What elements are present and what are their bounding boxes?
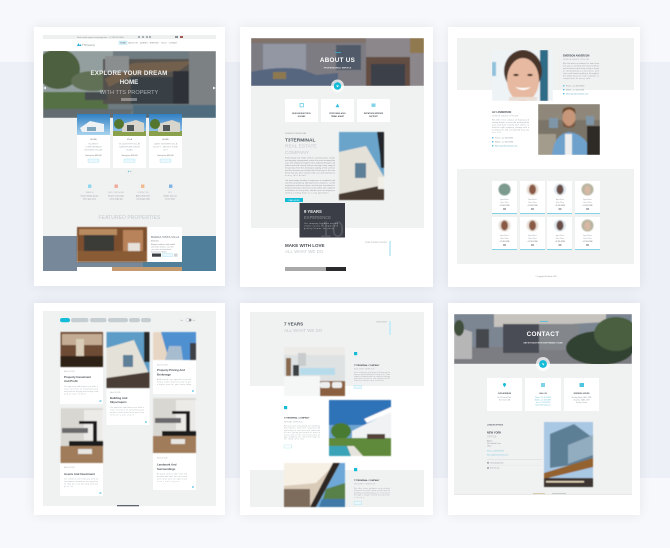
contact box: working hours: Monday-Friday: 9AM - 6PM <box>572 396 592 399</box>
side note with bar: SOME INTEREST WORDS <box>365 242 388 244</box>
contact hero: GET IN TOUCH WITH OUR FRIENDLY TEAM <box>523 342 563 344</box>
woman bio: or sell property at a fair price, with <box>563 70 599 72</box>
property card 2: LAKESHORE DRIVE <box>119 146 140 148</box>
contact building photo <box>544 422 593 487</box>
about text block: REAL ESTATE <box>285 144 317 150</box>
team grid: Sales Officer <box>556 237 565 240</box>
blog card 1: and private homes <box>64 392 86 396</box>
team grid: Sales Officer <box>528 201 537 204</box>
team grid: Agent Name <box>556 198 564 201</box>
team grid: +12 345 67890 <box>555 241 565 243</box>
about text block: confidence at every step, whether you are buying or <box>285 189 335 192</box>
property card 2: Starting from $520,000 <box>121 154 138 157</box>
team grid: +12 345 67890 <box>499 205 510 207</box>
service text 1 <box>354 352 391 388</box>
property card 2: VILLA <box>127 138 133 141</box>
office details: 10010 <box>487 446 491 448</box>
contact box: phone: CALL US <box>539 392 548 395</box>
view toggle: Grid <box>180 320 183 322</box>
man bio <box>492 111 529 148</box>
contact page body <box>454 364 632 494</box>
heading: make with love <box>285 243 324 254</box>
contact box: phone: Fax: +12 34 567892 <box>536 402 550 404</box>
property card 3: IN CITY - MIDDLE ZONE <box>153 146 178 148</box>
service text 3: through a single trusted local partner <box>354 494 390 497</box>
woman bio: She has been an advisor for more than <box>563 62 599 65</box>
feature icons: FIND YOUR HOME <box>108 192 125 194</box>
contact box: working hours: Saturday: 10AM - 4PM <box>573 398 590 402</box>
about text block: selling a family home or a city apartment. <box>285 192 329 194</box>
about text block: Our team brings decades of experience in residential and <box>285 179 335 182</box>
blog card 5: March 20, 2018 <box>157 456 168 460</box>
team grid: Agent Name <box>583 234 592 237</box>
blog card 2: Assets And Investment <box>64 472 95 476</box>
contact box: address <box>487 378 522 411</box>
heading: 7 years: ALL WHAT WE DO <box>284 328 323 333</box>
blog card 2: investment information on properties <box>64 480 98 483</box>
man bio: Mail: agent@realestate.com <box>495 144 518 148</box>
woman bio: clear and honest guidance throughout <box>563 72 600 75</box>
about text block: home that you have chosen with care and attention to <box>285 172 335 174</box>
property card 3: Starting from $610,000 <box>157 154 174 157</box>
grey band bottom <box>250 470 424 507</box>
about building photo <box>339 132 384 200</box>
panel: services page <box>240 303 433 515</box>
blog card 1: Property Investment <box>64 375 91 379</box>
grey page body <box>43 311 216 506</box>
service text 3: building and belongings at a fair price <box>354 491 390 494</box>
button: READ MORE <box>289 199 300 202</box>
bottom photo preview <box>285 267 346 271</box>
team grid: Agent Name <box>528 234 537 237</box>
about text block: protected and your decision can be taken with complete <box>285 186 335 190</box>
man bio: We offer clear advice on buying and <box>492 120 529 122</box>
featured property card: Starting from $540k <box>151 251 167 254</box>
experience box: Our company has been serving <box>304 222 338 225</box>
navigation: ABOUT US <box>128 41 138 44</box>
feature icons: CONTACT US <box>137 191 150 194</box>
team grid: Sales Officer <box>556 201 565 204</box>
blog card 3: industry purchase <box>110 414 134 416</box>
blog card 2: profits <box>64 485 73 488</box>
about text block: and the moment you finally collect the keys to the new <box>285 169 336 172</box>
top bar <box>43 35 216 39</box>
service photo 2: villa and pool <box>329 400 391 456</box>
feature boxes: PROPOSING A BIG <box>329 112 346 115</box>
blue band <box>43 236 216 271</box>
blog card 3: need to start and finish your own <box>110 411 144 414</box>
man bio: transparent and considered process <box>492 128 529 132</box>
about text block: every last detail. <box>285 174 307 177</box>
feature icons: secure deals <box>165 198 175 200</box>
woman bio: SENIOR SALES OFFICER <box>563 58 590 61</box>
blog card 5: Landmark And <box>157 462 177 466</box>
grey team band <box>457 169 634 264</box>
blog card 5: and close with an agent you <box>157 478 187 480</box>
property card 1 <box>77 114 110 168</box>
blog card 3: March 20, 2018 <box>110 391 121 394</box>
side note with bar: SOME WORDS <box>376 322 387 324</box>
navigation: TTProperty <box>82 43 96 47</box>
property cards <box>77 114 182 168</box>
contact hero <box>454 314 638 365</box>
navigation <box>77 41 178 47</box>
team grid: Sales Officer <box>500 237 509 240</box>
feature boxes: BUILD BUDGET RICH <box>292 113 311 115</box>
featured property card: BUENA VISTA VILLA <box>151 235 179 239</box>
blog card 3: Our agencies and brokers can offer a <box>110 406 144 409</box>
woman bio: Mail: agent@realestate.com <box>566 92 589 96</box>
about text block: area, with experienced agents who understand buyers and <box>285 162 335 164</box>
team grid <box>492 181 600 250</box>
service text 1: families and private investors <box>354 379 384 382</box>
property card 1: COMFORTABLE <box>85 146 102 148</box>
team grid: Sales Officer <box>528 237 537 240</box>
blog card 2: March 20, 2018 <box>64 466 75 469</box>
blog card 1: need before buying and selling land <box>64 390 98 393</box>
panel: blog page <box>34 303 225 515</box>
blog card 1: Our agencies and brokers can offer a <box>64 385 98 388</box>
office details: New York City <box>490 467 500 470</box>
office details: LONDON OFFICES <box>487 424 504 426</box>
featured property card: and timber finishes, near the <box>151 246 174 248</box>
property card 2: ROAD <box>126 148 133 152</box>
woman bio: Mobile: +12 345 67891 <box>566 90 584 92</box>
grey page body <box>43 118 216 271</box>
team grid: Sales Officer <box>500 201 509 204</box>
team grid: +12 345 67890 <box>499 241 510 243</box>
icon: teal circle badge <box>536 357 550 371</box>
team grid: +12 345 67890 <box>527 205 538 207</box>
service text 1: homes and buildings of every size, from <box>354 374 391 376</box>
feature icons: every single day <box>110 198 123 200</box>
blog card 5: Surroundings <box>157 467 176 471</box>
service text 1: and construction of new properties for <box>354 377 390 380</box>
office details: Phone: +1234 5678 900 <box>487 450 504 452</box>
blog card 1: clear overview of everything you <box>64 388 98 390</box>
blog card 4: Property Pricing And <box>157 368 185 372</box>
property card 1: MODERN VILLAS <box>85 148 103 152</box>
about text block: and property management across the entire metropolitan <box>285 159 335 162</box>
side note with bar <box>365 241 391 256</box>
feature icons: Browse new listings <box>108 194 124 198</box>
team grid: Agent Name <box>500 234 509 237</box>
property card 3: OASIS MODERN VILLA <box>154 142 178 146</box>
view toggle: List <box>192 319 196 322</box>
team grid: Agent Name <box>583 198 592 201</box>
experience box: EXPERIENCE <box>304 215 331 220</box>
service text 2: T3TERMINAL COMPANY <box>284 416 310 420</box>
feature icons <box>81 184 176 200</box>
about text block: T3TERMINAL <box>285 138 315 144</box>
contact box: phone: Mail: info@realty.com <box>535 404 551 406</box>
feature icons: Simple, fast and <box>164 194 176 198</box>
load more bar <box>117 505 139 506</box>
blog card 1: March 20, 2018 <box>64 370 75 373</box>
feature icons: BUY <box>168 192 173 194</box>
office details: Address: <box>487 440 494 442</box>
about text block: negotiation and clear advice, so that your investment is <box>285 184 335 187</box>
service text 1: BUILDING SERVICE <box>354 368 375 370</box>
heading: 7 years <box>284 322 323 333</box>
side note with bar <box>376 321 391 335</box>
team grid: Agent Name <box>500 198 509 201</box>
button <box>285 198 303 202</box>
about hero: ABOUT US <box>320 57 355 64</box>
team grid: Agent Name <box>528 198 537 201</box>
team grid: +12 345 67890 <box>582 241 593 243</box>
experience box: clients across the region with <box>304 224 338 228</box>
service text 2: RENTAL SERVICE <box>284 420 303 424</box>
man bio: SENIOR SALES OFFICER <box>492 114 519 118</box>
service text 3: SECURITY SERVICE <box>354 484 376 486</box>
property card 1: HOUSE <box>90 139 97 141</box>
service text 3: insurance for your home, protecting the <box>354 489 390 492</box>
about hero: PROFESSIONAL SERVICE <box>324 66 352 70</box>
blog card 4: Brokerage <box>157 372 171 376</box>
blog card 4: March 20, 2018 <box>157 364 168 366</box>
contact box: phone: Mobile: +12 34 567891 <box>535 400 551 402</box>
heading: make with love: ALL WHAT WE DO <box>285 249 324 254</box>
service photo 1: kitchen <box>284 347 345 396</box>
man bio: LILY ANDERSON <box>492 111 511 114</box>
about text block: commercial property, offering honest valuation, careful <box>285 182 336 184</box>
featured property card: $540,000 <box>151 240 158 242</box>
view toggle <box>180 318 196 322</box>
blog card 3 <box>106 332 150 425</box>
blog card 2 <box>60 408 103 496</box>
panel: team page <box>448 27 640 287</box>
panel: contact page <box>448 303 640 515</box>
experience box <box>300 203 345 242</box>
service text 1: T3TERMINAL COMPANY <box>354 364 380 367</box>
feature icons: Search listings by city, <box>81 194 99 198</box>
service text 2: every step of the rental process of <box>284 433 321 436</box>
blog card 1: And Profit <box>64 379 78 383</box>
footer note: © Copyright Real Estate 2018 <box>535 275 557 278</box>
office details: Mail: support@realestate.com <box>487 454 509 456</box>
heading: make with love: MAKE WITH LOVE <box>285 243 324 248</box>
blog card 2: Our advisors will help you with all <box>64 478 99 480</box>
next property preview <box>77 267 182 271</box>
service text 2: of rent, giving you peace of mind in <box>284 431 320 434</box>
office details: 300 Colorado Center <box>487 442 501 445</box>
blog card 1 <box>60 332 103 404</box>
service text 3: T3TERMINAL COMPANY <box>354 479 380 482</box>
contact box: working hours <box>564 378 599 411</box>
service text 2 <box>284 406 321 448</box>
property card 2 <box>113 114 146 168</box>
service text 1: simple refurbishment to complete design <box>354 375 390 378</box>
hero photo <box>36 49 216 118</box>
featured property card: Elegant residence with marble <box>151 243 175 246</box>
feature boxes <box>285 99 390 122</box>
blog card 5: Be quick with an offer from the <box>157 472 187 476</box>
service text 2: for long term lets <box>284 438 304 441</box>
slider dots <box>128 171 131 172</box>
contact box: address: New York, USA <box>499 398 511 402</box>
property card 2: VILLA WITH POOL AT <box>119 142 141 146</box>
grey top band <box>457 38 634 90</box>
about text block <box>285 132 336 194</box>
service text 2: and tenants, from first valuation and <box>284 427 320 430</box>
navigation: BLOG <box>162 42 167 44</box>
service photo 3: glass room <box>284 463 345 507</box>
about hero <box>251 38 424 86</box>
heading: 7 years: 7 YEARS <box>284 322 303 326</box>
blog card 4: estate teams show you how to get <box>157 380 192 384</box>
office details <box>487 424 542 470</box>
filter pills <box>60 318 151 322</box>
service text 1: Cost estimates and project planning for <box>354 371 390 374</box>
featured property card: city centre and waterfront <box>151 248 172 251</box>
blog card 5 <box>153 398 196 490</box>
blog card 5: location and near the city centre <box>157 475 187 478</box>
panel: about page <box>240 27 433 287</box>
about text block: Professional real estate services covering sales, rentals <box>285 156 335 160</box>
contact box: address: No 23 Central Park, <box>498 396 512 399</box>
man bio: find the right property, always with a <box>492 126 529 129</box>
service text 3 <box>354 468 390 504</box>
team grid: Agent Name <box>556 234 564 237</box>
contact box: phone: Phone: +12 34 567890 <box>535 397 551 399</box>
grey band top <box>250 312 424 386</box>
blog card 3: Building And <box>110 396 128 400</box>
feature icons: SEARCH <box>86 191 94 194</box>
team grid: Sales Officer <box>583 237 592 240</box>
featured property card <box>77 227 182 262</box>
team grid: +12 345 67890 <box>582 205 593 207</box>
office details: 123 Colorado Street <box>490 461 504 464</box>
navigation: CONTACT <box>169 41 178 44</box>
blog card 3: Skyscrapers <box>110 400 127 404</box>
man bio: for all. <box>492 132 502 134</box>
man portrait <box>538 104 600 155</box>
about text block: WE ARE PROFESSIONAL <box>285 132 306 135</box>
feature icons: Agents that listen <box>136 194 150 198</box>
property card 3: HOUSE <box>162 139 169 141</box>
woman bio: and investors who want to buy a home <box>563 67 599 70</box>
blog card 4: a higher price for your home today <box>157 383 191 386</box>
woman bio: completion of every sale. <box>563 77 592 80</box>
service text 2: We look after everything for landlords <box>284 424 320 428</box>
panel: home page <box>34 27 225 286</box>
feature boxes: INITIATORS INTERIOR <box>364 112 384 115</box>
navigation: SERVICES <box>149 42 159 44</box>
heading: featured properties: FEATURED PROPERTIES <box>98 215 161 221</box>
experience box: 10 <box>320 217 344 242</box>
service text 2: your property, for short term stays or <box>284 436 320 438</box>
experience box: 9 YEARS <box>304 209 322 214</box>
service text 2: marketing to contracts and collection <box>284 429 320 432</box>
contact box: phone <box>525 378 561 411</box>
woman bio <box>563 54 600 96</box>
experience box: quality homes for years <box>304 227 334 230</box>
service text 3: We offer clear guidance and reliable <box>354 488 390 490</box>
blog card 4 <box>153 332 196 394</box>
about text block: COMPANY <box>285 150 310 156</box>
woman bio: Phone: +12 345 67890 <box>566 86 584 88</box>
team grid: Sales Officer <box>583 201 592 204</box>
man bio: Phone: +12 345 67890 <box>495 138 513 140</box>
feature icons: state, type, price <box>83 198 96 200</box>
man bio: Mobile: +12 345 67891 <box>495 142 513 144</box>
service text 3: always <box>354 497 364 499</box>
about text block: the journey, from first viewing to signing of the contract <box>285 166 335 170</box>
navigation: AGENTS <box>140 41 148 44</box>
team grid: +12 345 67890 <box>555 205 565 207</box>
man bio: selling homes across the metropolitan <box>492 121 529 124</box>
woman bio: the whole process, from valuation to <box>563 74 599 78</box>
blog card 4: Additionally, our agencies and real <box>157 378 192 381</box>
property card 3 <box>149 114 182 168</box>
contact box: working hours: Sunday: Closed <box>576 402 587 404</box>
office details: OFFICE <box>487 434 497 438</box>
woman bio: EMERSON ANDERSON <box>563 54 590 58</box>
about text block: sellers and work closely with you through every stage of <box>285 164 335 167</box>
map strip <box>454 493 632 495</box>
woman portrait <box>492 50 553 102</box>
blog card 5: trust and agree <box>157 480 179 483</box>
blog card 3: clear overview of everything you <box>110 408 144 412</box>
contact hero: CONTACT <box>527 331 559 338</box>
feature boxes: TRIBAL AGENT <box>331 115 345 118</box>
navigation: HOME <box>120 42 126 44</box>
hero photo: EXPLORE YOUR DREAM <box>90 70 168 77</box>
contact box: working hours: WORKING HOURS <box>574 393 590 395</box>
hero photo: HOME <box>120 79 138 86</box>
top bar: Real estate agents and properties · +1 234 567 8900 <box>77 36 125 39</box>
blog card 2: so that you can develop and sell <box>64 482 99 486</box>
feature boxes: SUPPORT <box>369 116 379 118</box>
office details: NEW YORK <box>487 430 501 434</box>
woman bio: ten years, working with local families <box>563 64 599 68</box>
property card 1: BLUESKY <box>88 144 99 146</box>
property card 3: CITY <box>163 150 169 152</box>
contact box: address: OUR ADDRESS <box>498 392 512 395</box>
property card 1: Starting from $490,000 <box>85 154 102 157</box>
feature icons: and always reply <box>136 198 150 200</box>
feature boxes: HOUSES <box>298 116 306 118</box>
about page body <box>251 86 424 228</box>
team grid: +12 345 67890 <box>527 241 538 243</box>
man bio: area and work closely with clients to <box>492 124 529 126</box>
icon: teal circle badge <box>331 80 344 92</box>
hero photo: WITH TTS PROPERTY <box>100 90 159 96</box>
